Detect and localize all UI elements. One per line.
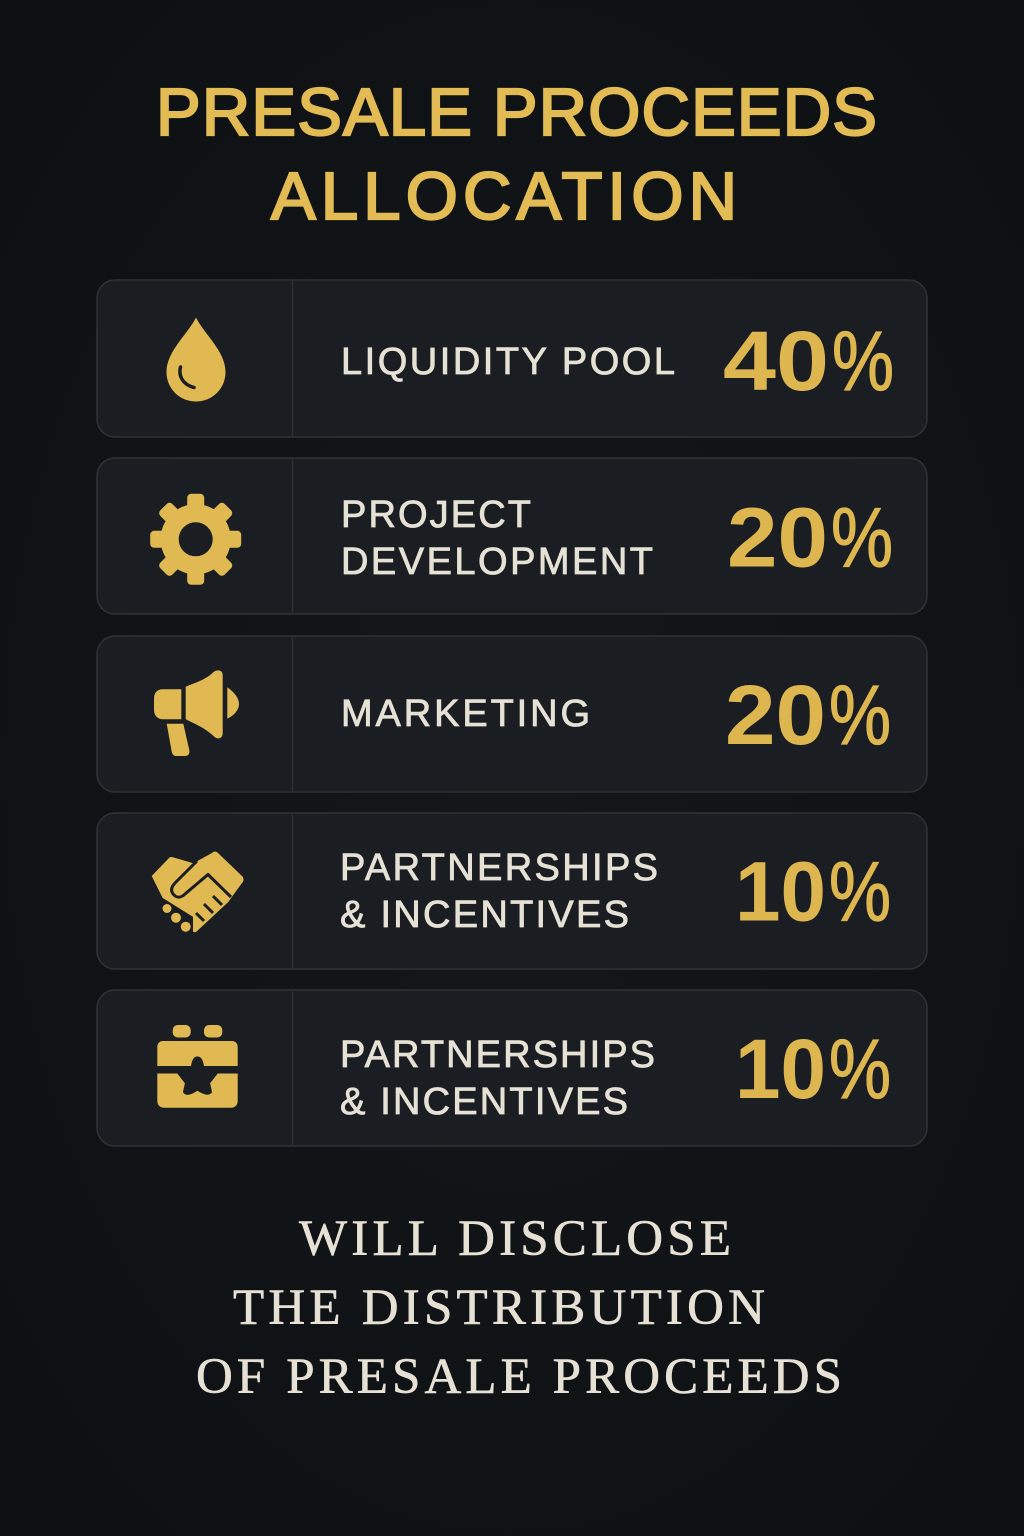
value: 40%: 40 [723, 314, 829, 408]
value: 10% [735, 1022, 891, 1116]
value: 40%: % [832, 314, 894, 408]
footer text: OF PRESALE PROCEEDS [196, 1349, 842, 1405]
label: partnerships and incentives: & INCENTIVES [340, 894, 629, 936]
label: partnerships and incentives [340, 847, 658, 936]
value: 10%: 10 [735, 844, 826, 938]
value: 10% [735, 844, 891, 938]
icon: gift box with star [155, 1025, 240, 1108]
title: ALLOCATION [271, 159, 737, 234]
icon: water drop [166, 318, 226, 402]
value: 20% [727, 490, 893, 584]
panel: marketing 20% [97, 636, 927, 792]
value: 20%: % [829, 668, 891, 762]
footer text: WILL DISCLOSE [299, 1211, 731, 1267]
title [156, 75, 877, 234]
label: project development [341, 494, 653, 583]
value: 20% [725, 668, 891, 762]
panel: partnerships and incentives second 10% [97, 990, 927, 1146]
panel: partnerships and incentives 10% [97, 813, 927, 969]
label: partnerships and incentives: & INCENTIVES [340, 1081, 628, 1123]
value: 10%: % [829, 844, 891, 938]
value: 20%: 20 [725, 668, 826, 762]
label: marketing: MARKETING [341, 693, 590, 735]
footer text: THE DISTRIBUTION [233, 1280, 765, 1336]
title: PRESALE PROCEEDS [156, 75, 877, 150]
footer text [196, 1211, 842, 1405]
label: partnerships and incentives: PARTNERSHIPS [340, 847, 658, 889]
label: liquidity pool: LIQUIDITY POOL [341, 341, 675, 383]
value: 40% [723, 314, 894, 408]
panel: liquidity pool 40% [97, 280, 927, 437]
panel: project development 20% [97, 458, 927, 614]
value: 20%: % [831, 490, 893, 584]
value: 10%: 10 [735, 1022, 826, 1116]
label: project development: PROJECT [341, 494, 531, 536]
label: project development: DEVELOPMENT [341, 541, 653, 583]
label: partnerships and incentives [340, 1034, 655, 1123]
icon: handshake [152, 852, 244, 932]
value: 20%: 20 [727, 490, 828, 584]
value: 10%: % [829, 1022, 891, 1116]
icon: megaphone [154, 670, 239, 756]
icon: gear [150, 494, 241, 585]
label: partnerships and incentives: PARTNERSHIPS [340, 1034, 655, 1076]
